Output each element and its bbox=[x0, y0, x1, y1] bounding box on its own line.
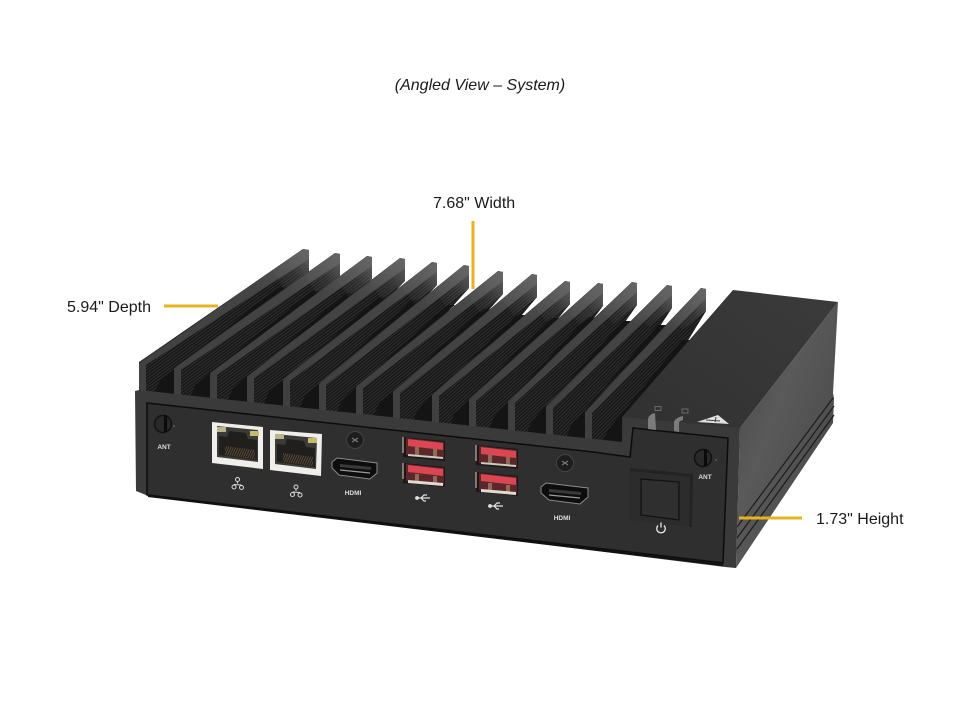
depth callout: 5.94" Depth bbox=[67, 299, 151, 316]
USB port column 1 top bbox=[403, 437, 445, 461]
height callout: 1.73" Height bbox=[816, 511, 904, 528]
LAN port 1 bbox=[212, 422, 263, 469]
antenna left: ANT bbox=[157, 444, 171, 451]
USB port column 2 top bbox=[476, 445, 518, 469]
HDMI label 2: HDMI bbox=[554, 515, 570, 522]
front panel bbox=[147, 403, 728, 563]
antenna left bbox=[154, 415, 175, 451]
enclosure top bbox=[622, 290, 838, 444]
USB icon 1 bbox=[416, 495, 430, 501]
enclosure side with ribs bbox=[736, 302, 838, 568]
heat sink fins bbox=[139, 249, 706, 444]
antenna right: ANT bbox=[698, 474, 712, 481]
USB icon 2 bbox=[489, 503, 503, 509]
system chassis bbox=[135, 249, 838, 568]
screw 2 bbox=[556, 454, 574, 472]
HDMI port 2 bbox=[541, 483, 588, 504]
front frame bbox=[135, 390, 740, 568]
LAN icon 1 bbox=[232, 478, 244, 490]
title: (Angled View – System) bbox=[395, 77, 565, 94]
warning triangle bbox=[697, 415, 729, 424]
HDMI label 1: HDMI bbox=[345, 490, 361, 497]
LAN port 2 bbox=[270, 430, 322, 476]
LAN icon 2 bbox=[290, 485, 302, 497]
width callout bbox=[433, 195, 515, 289]
antenna right bbox=[694, 449, 717, 481]
power icon bbox=[657, 522, 665, 533]
USB port column 1 bottom bbox=[403, 463, 445, 487]
power button housing bbox=[630, 468, 693, 527]
status latches bbox=[648, 413, 683, 432]
screw 1 bbox=[346, 432, 364, 448]
width callout: 7.68" Width bbox=[433, 195, 515, 212]
USB port column 2 bottom bbox=[476, 472, 518, 496]
HDMI port 1 bbox=[332, 458, 377, 479]
status icons bbox=[655, 406, 688, 413]
